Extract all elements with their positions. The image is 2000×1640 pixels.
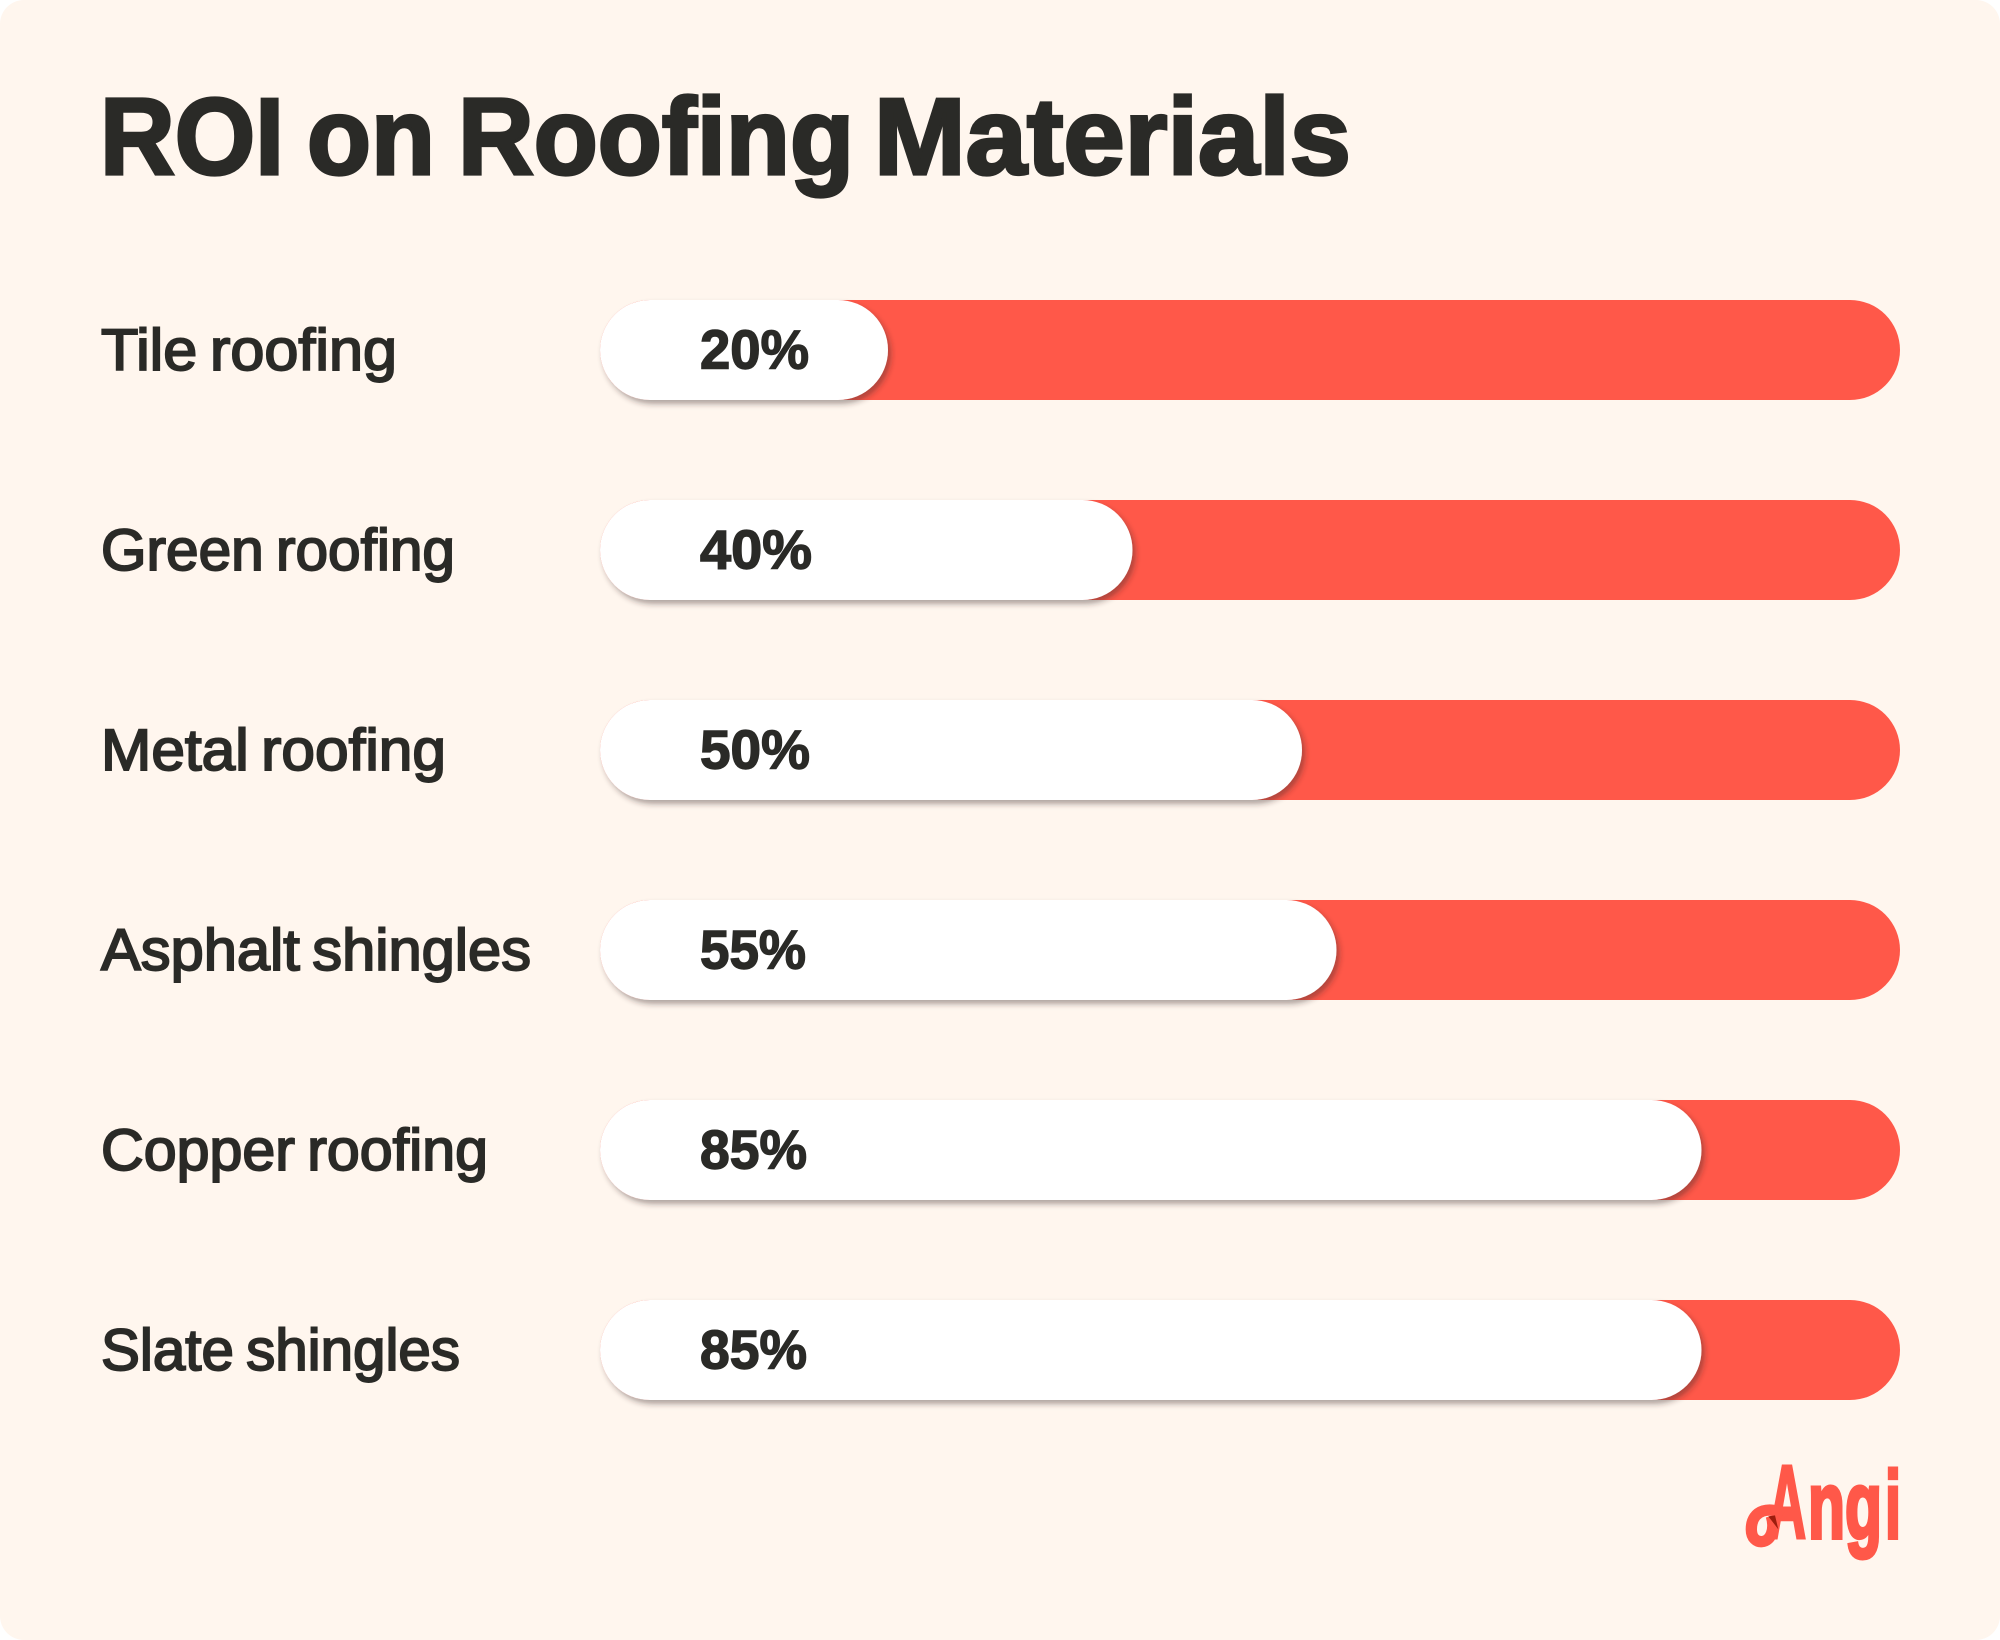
label: Metal roofing: Metal roofing — [101, 718, 446, 783]
row: Copper roofing — [101, 1100, 1900, 1200]
logo: Angi — [1751, 1445, 1901, 1561]
label: Slate shingles: Slate shingles — [101, 1318, 460, 1383]
value 40%: 40% — [700, 518, 812, 580]
label: Asphalt shingles: Asphalt shingles — [101, 918, 531, 983]
row: Tile roofing — [101, 300, 1900, 400]
value 50%: 50% — [700, 718, 810, 780]
row: Slate shingles — [101, 1300, 1900, 1400]
label: Copper roofing: Copper roofing — [101, 1118, 488, 1183]
bar fill 55% — [600, 900, 1336, 1000]
row: Metal roofing — [101, 700, 1900, 800]
title: ROI — [100, 76, 284, 198]
bar fill 20% — [600, 300, 888, 400]
value 20%: 20% — [700, 318, 809, 380]
logo: Angi: i — [1885, 1452, 1901, 1559]
value 55%: 55% — [700, 918, 806, 980]
title: on — [307, 76, 435, 198]
logo: Angi: A — [1768, 1445, 1806, 1561]
logo: Angi: ng — [1808, 1452, 1882, 1559]
row: Green roofing — [101, 500, 1900, 600]
title: Materials — [874, 76, 1351, 198]
value 85%: 85% — [700, 1118, 807, 1180]
bar track — [600, 1300, 1900, 1400]
bar fill 85% — [600, 1100, 1702, 1200]
title: Roofing — [458, 76, 854, 198]
bar track — [600, 300, 1900, 400]
row: Asphalt shingles — [101, 900, 1900, 1000]
bar track — [600, 500, 1900, 600]
title — [100, 76, 1351, 198]
bar fill 85% — [600, 1300, 1702, 1400]
bar fill 40% — [600, 500, 1132, 600]
label: Green roofing: Green roofing — [101, 518, 455, 583]
bar track — [600, 700, 1900, 800]
value 85%: 85% — [700, 1318, 807, 1380]
bar track — [600, 1100, 1900, 1200]
label: Tile roofing: Tile roofing — [101, 318, 397, 383]
bar fill 50% — [600, 700, 1302, 800]
bar track — [600, 900, 1900, 1000]
